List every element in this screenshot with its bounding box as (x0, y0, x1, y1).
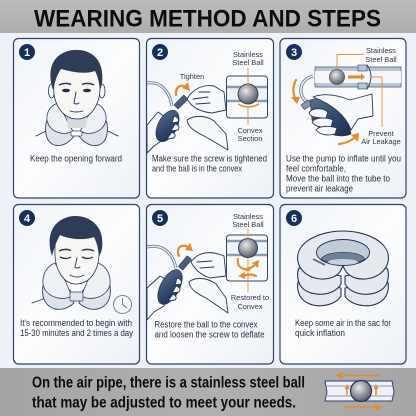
label: convex section: Section (238, 134, 262, 143)
illustration: man resting in neck pillow (32, 216, 110, 309)
label: restored to convex (231, 293, 269, 311)
caption 5: Restore the ball to the convex (154, 320, 258, 330)
illustration: hands with pump bulb and screw (147, 82, 228, 153)
label: restored to convex: Restored to (231, 293, 269, 302)
label: stainless steel ball (365, 46, 397, 64)
label: stainless steel ball (232, 212, 264, 229)
arrow: move right (345, 404, 382, 410)
caption 6: quick inflation (295, 328, 345, 338)
footer text: that may be adjusted to meet your needs. (32, 394, 296, 412)
illustration: hands with pump bulb and screw (147, 243, 228, 320)
inset: ball in convex (226, 68, 268, 125)
step number 5 (152, 210, 168, 226)
caption 2 (152, 154, 267, 174)
caption 3: prevent air leakage (286, 184, 353, 194)
panel 6: keep some air (280, 204, 406, 364)
label: tighten: Tighten (180, 72, 204, 81)
caption 3 (286, 154, 401, 194)
step number 3: 3 (291, 47, 297, 59)
footer text: On the air pipe, there is a stainless steel ball (32, 374, 305, 392)
caption 4: 15-30 minutes and 2 times a day (20, 328, 133, 338)
label: stainless steel ball: Steel Ball (232, 220, 264, 229)
label: prevent air leakage (361, 129, 401, 146)
label: convex section: Convex (237, 126, 263, 135)
step number 6: 6 (291, 213, 297, 225)
caption 2: and the ball is in the convex (152, 164, 242, 174)
step number 1 (19, 44, 35, 60)
step number 3 (286, 44, 302, 60)
arrow: loosen direction (178, 243, 193, 256)
arrow: pump motion left (291, 80, 300, 104)
icon: air pipe with ball and arrows (325, 372, 394, 410)
panel 4: recommended duration (14, 204, 140, 364)
step number 2: 2 (157, 47, 163, 59)
caption 4 (20, 318, 133, 338)
step number 1: 1 (24, 47, 30, 59)
illustration: hand squeezing bulb (291, 76, 373, 144)
inset: ball restored to convex (226, 229, 268, 292)
step number 6 (286, 210, 302, 226)
arrow: tighten direction (176, 82, 190, 95)
illustration: inflatable neck pillow (298, 231, 388, 306)
step number 4 (19, 210, 35, 226)
label: stainless steel ball: Stainless (233, 50, 263, 59)
label: prevent air leakage: Prevent (368, 129, 394, 138)
panel 1: keep the opening forward (14, 38, 140, 198)
caption 6: Keep some air in the sac for (295, 318, 391, 328)
label: stainless steel ball (232, 50, 264, 67)
panel 5: restore ball (146, 204, 274, 364)
step number 2 (152, 44, 168, 60)
header band with title: WEARING METHOD AND STEPS (34, 6, 381, 33)
label: restored to convex: Convex (237, 302, 263, 311)
label: stainless steel ball: Steel Ball (365, 55, 397, 64)
label: prevent air leakage: Air Leakage (361, 137, 401, 146)
footer band (0, 368, 416, 416)
caption 4: It's recommended to begin with (20, 318, 132, 328)
label: stainless steel ball: Stainless (233, 212, 263, 221)
caption 5 (154, 320, 265, 340)
step number 4: 4 (24, 213, 31, 225)
panel 2: tighten screw (146, 38, 274, 198)
label: stainless steel ball: Steel Ball (232, 58, 264, 67)
label: convex section (237, 126, 263, 143)
illustration: man wearing neck pillow (36, 50, 118, 146)
footer text (32, 374, 305, 412)
label: stainless steel ball: Stainless (366, 46, 396, 55)
caption 3: feel comfortable, (286, 164, 346, 174)
arrow: move left (335, 372, 380, 379)
caption 6 (295, 318, 391, 338)
caption 5: and loosen the screw to deflate (154, 330, 265, 340)
arrow: pump motion bottom (339, 133, 359, 144)
caption 1: Keep the opening forward (30, 154, 122, 164)
caption 2: Make sure the screw is tightened (152, 154, 267, 164)
illustration: air tube with ball (315, 54, 401, 127)
step number 5: 5 (157, 213, 163, 225)
caption 3: Use the pump to inflate until you (286, 154, 401, 164)
icon: clock (114, 296, 132, 314)
panel 3: inflate (280, 38, 406, 198)
caption 3: Move the ball into the tube to (286, 174, 390, 184)
